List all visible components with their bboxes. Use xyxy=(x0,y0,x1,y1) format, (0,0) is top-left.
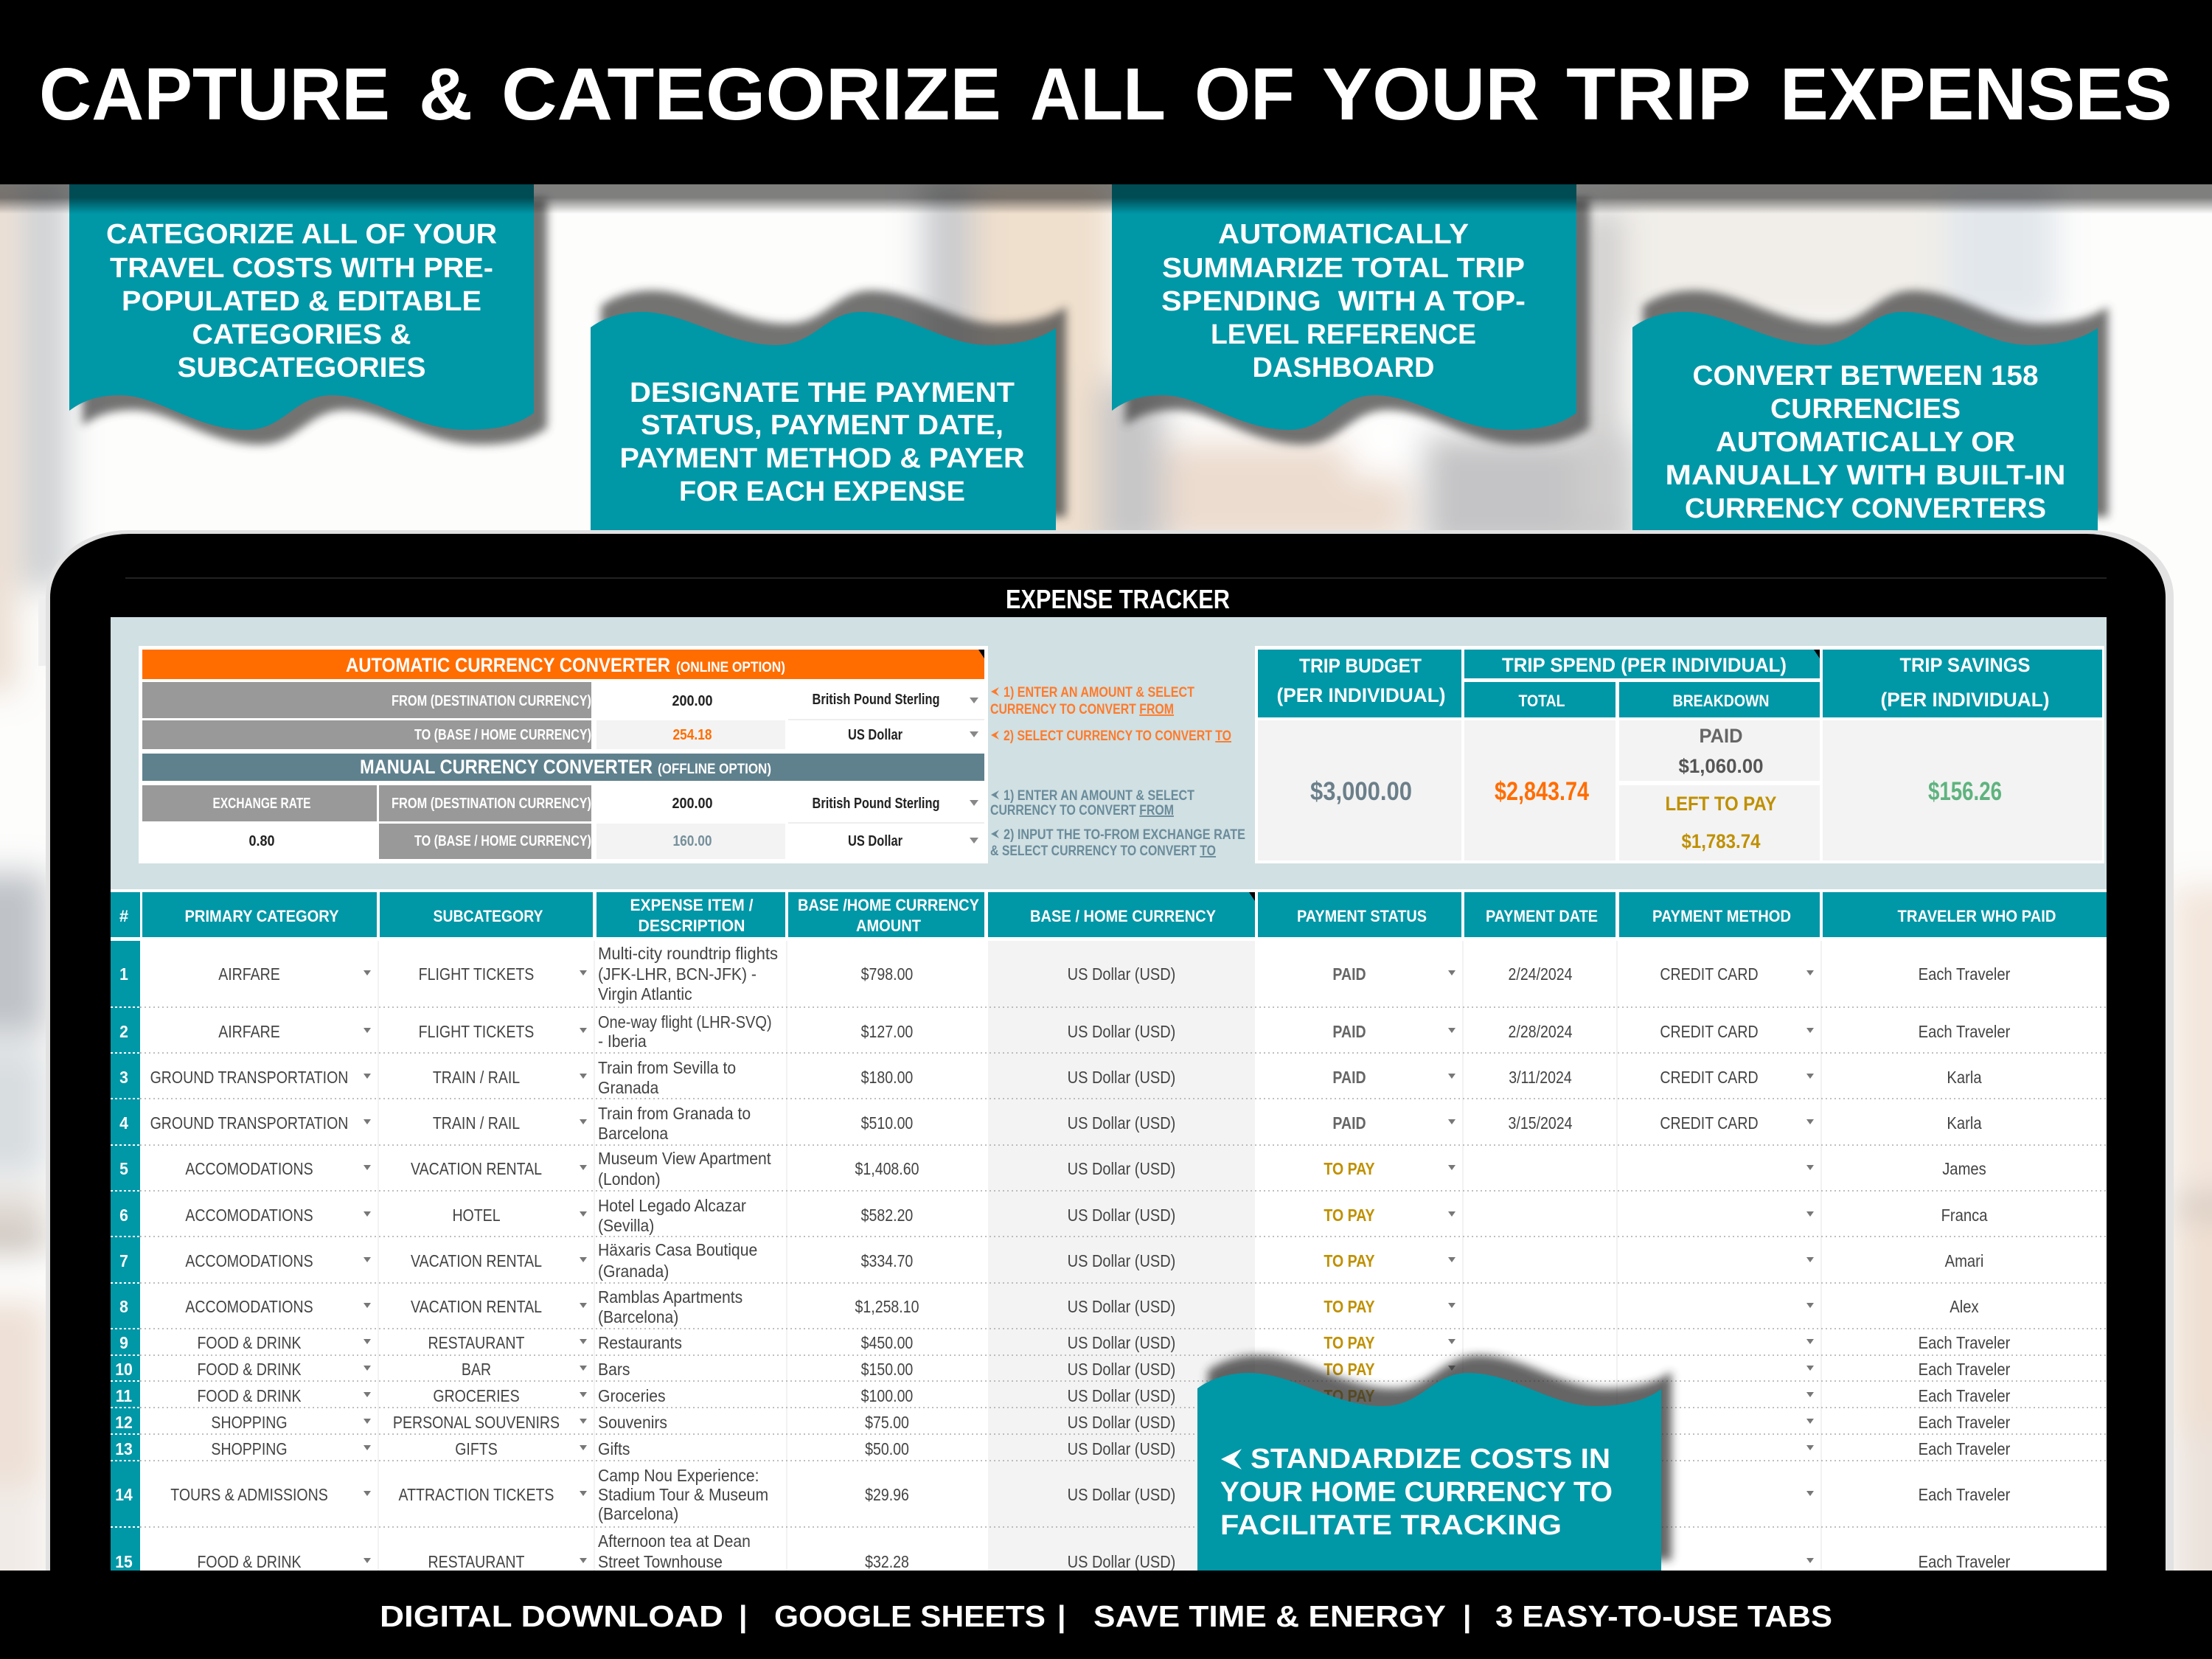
table header row: TRAVELER WHO PAID xyxy=(1898,907,2056,925)
callout: categorize costs: CATEGORIZE ALL OF YOUR xyxy=(106,219,497,250)
row 15: US Dollar (USD) xyxy=(1068,1552,1175,1571)
row 2: 2 xyxy=(119,1022,128,1041)
row 6: Hotel Legado Alcazar xyxy=(598,1196,746,1215)
panel: trip summary dashboard: TRIP BUDGET xyxy=(1299,655,1422,677)
row 4 xyxy=(119,1104,1983,1143)
table header row: SUBCATEGORY xyxy=(434,907,543,925)
row 3: Train from Sevilla to xyxy=(598,1058,736,1077)
row 11: Groceries xyxy=(598,1386,666,1405)
dropdown arrows xyxy=(364,970,1814,1563)
panel: converter instructions: 2) SELECT CURRENCY TO CONVERT TO xyxy=(1004,728,1231,744)
panel: currency converter: British Pound Sterling xyxy=(813,692,939,708)
row 10: BAR xyxy=(462,1360,491,1379)
row 1: Virgin Atlantic xyxy=(598,984,692,1004)
row 5: US Dollar (USD) xyxy=(1068,1159,1175,1178)
row 10: Each Traveler xyxy=(1919,1360,2010,1379)
callout: summarize spending: LEVEL REFERENCE xyxy=(1211,319,1476,350)
panel: trip summary dashboard: LEFT TO PAY xyxy=(1665,793,1777,815)
row 15: $32.28 xyxy=(865,1553,909,1571)
panel: trip summary dashboard: $156.26 xyxy=(1928,777,2002,806)
callout: convert currencies: CURRENCY CONVERTERS xyxy=(1685,493,2046,524)
row 13: GIFTS xyxy=(455,1440,498,1458)
table header row: # xyxy=(119,907,128,925)
row 4: TRAIN / RAIL xyxy=(433,1114,520,1133)
row 4: 3/15/2024 xyxy=(1509,1114,1573,1133)
row 11: Each Traveler xyxy=(1919,1386,2010,1405)
footer bar: | xyxy=(1057,1599,1065,1633)
panel: currency converter: TO (BASE / HOME CURRENCY) xyxy=(414,833,591,849)
panel: converter instructions: 2) INPUT THE TO-FROM EXCHANGE RATE xyxy=(1004,827,1245,843)
row 9: Restaurants xyxy=(598,1333,682,1352)
panel: expense table xyxy=(111,889,2107,1571)
row 15: Street Townhouse xyxy=(598,1552,723,1571)
callout: categorize costs: SUBCATEGORIES xyxy=(177,352,426,383)
row 14 xyxy=(115,1466,2010,1523)
row 3: Granada xyxy=(598,1078,659,1097)
panel: trip summary dashboard: $2,843.74 xyxy=(1495,777,1589,806)
row 1: CREDIT CARD xyxy=(1660,965,1759,984)
row 6: TO PAY xyxy=(1324,1206,1375,1225)
row 11: FOOD & DRINK xyxy=(197,1387,302,1405)
title banner: & xyxy=(419,53,473,136)
callout: summarize spending: SPENDING WITH A TOP- xyxy=(1161,286,1526,317)
row 14: 14 xyxy=(115,1485,133,1504)
row 13: Each Traveler xyxy=(1919,1439,2010,1458)
row 14: Camp Nou Experience: xyxy=(598,1466,759,1485)
row 9: FOOD & DRINK xyxy=(197,1334,302,1352)
row 7: Häxaris Casa Boutique xyxy=(598,1240,757,1259)
title banner xyxy=(0,0,2212,184)
row 9: RESTAURANT xyxy=(428,1334,524,1352)
row 1: 2/24/2024 xyxy=(1509,965,1573,984)
panel: trip summary dashboard: $3,000.00 xyxy=(1310,777,1412,806)
row 7: (Granada) xyxy=(598,1262,669,1281)
row 3: 3 xyxy=(119,1068,128,1087)
title banner: CAPTURE xyxy=(39,53,390,136)
row 6: ACCOMODATIONS xyxy=(185,1206,313,1225)
row 8: ACCOMODATIONS xyxy=(185,1298,313,1316)
row 8: Alex xyxy=(1950,1297,1979,1316)
row 11: GROCERIES xyxy=(433,1387,520,1405)
row 4: 4 xyxy=(119,1113,129,1133)
footer bar: SAVE TIME & ENERGY xyxy=(1093,1599,1446,1633)
panel: currency converter: 160.00 xyxy=(672,833,712,849)
row 15: Each Traveler xyxy=(1919,1552,2010,1571)
row 12: $75.00 xyxy=(865,1413,909,1432)
footer bar xyxy=(0,1571,2212,1659)
row 4: Barcelona xyxy=(598,1124,669,1143)
row 6: $582.20 xyxy=(861,1206,913,1225)
row 1: 1 xyxy=(119,964,128,984)
row 3: PAID xyxy=(1332,1068,1366,1087)
row 9: 9 xyxy=(119,1333,128,1352)
row 2: $127.00 xyxy=(861,1023,913,1041)
panel: currency converter: EXCHANGE RATE xyxy=(212,796,311,812)
row 8: (Barcelona) xyxy=(598,1307,678,1326)
row 14: US Dollar (USD) xyxy=(1068,1485,1175,1504)
row 14: TOURS & ADMISSIONS xyxy=(170,1486,328,1504)
row 8: TO PAY xyxy=(1324,1298,1375,1316)
callout: convert currencies: MANUALLY WITH BUILT-IN xyxy=(1665,460,2066,491)
callout: standardize costs xyxy=(1197,1355,1672,1578)
panel: converter instructions: CURRENCY TO CONVERT FROM xyxy=(990,803,1174,818)
row 3 xyxy=(119,1058,1983,1097)
row 3: 3/11/2024 xyxy=(1509,1068,1572,1087)
row 13: 13 xyxy=(115,1439,133,1458)
row 9: US Dollar (USD) xyxy=(1068,1333,1175,1352)
row 5: ACCOMODATIONS xyxy=(185,1160,313,1178)
row 13: Gifts xyxy=(598,1439,630,1458)
row 2: CREDIT CARD xyxy=(1660,1023,1759,1041)
footer bar: | xyxy=(739,1599,747,1633)
callout: summarize spending xyxy=(1112,184,1590,445)
panel: converter instructions xyxy=(990,685,1245,859)
row 12: SHOPPING xyxy=(211,1413,288,1432)
callout: payment status: DESIGNATE THE PAYMENT xyxy=(630,378,1015,408)
row 2: - Iberia xyxy=(598,1032,647,1051)
panel: currency converter: US Dollar xyxy=(848,833,902,849)
footer bar: | xyxy=(1463,1599,1471,1633)
table header row: PAYMENT STATUS xyxy=(1297,907,1427,925)
row 7: VACATION RENTAL xyxy=(411,1252,542,1270)
row 11: TO PAY xyxy=(1324,1387,1375,1405)
panel: converter instructions: 1) ENTER AN AMOUNT & SELECT xyxy=(1004,685,1194,700)
panel: currency converter: 200.00 xyxy=(672,693,712,709)
row 10 xyxy=(115,1360,2010,1379)
row 11: 11 xyxy=(116,1386,132,1405)
row 5: James xyxy=(1942,1159,1986,1178)
header shadow xyxy=(0,184,2212,214)
title banner: TRIP xyxy=(1566,53,1751,136)
spreadsheet screen xyxy=(111,584,2107,1571)
row 2: PAID xyxy=(1332,1023,1366,1041)
panel: currency converter: 0.80 xyxy=(249,833,274,849)
panel: currency converter: 254.18 xyxy=(672,727,712,743)
panel: trip summary dashboard: TRIP SAVINGS xyxy=(1899,654,2031,676)
panel: currency converter: FROM (DESTINATION CURRENCY) xyxy=(392,796,591,812)
callout: payment status: PAYMENT METHOD & PAYER xyxy=(619,443,1025,474)
row 4: GROUND TRANSPORTATION xyxy=(150,1114,348,1133)
row 15 xyxy=(115,1531,2010,1571)
row 5: (London) xyxy=(598,1169,661,1189)
table header row: PRIMARY CATEGORY xyxy=(184,907,339,925)
row 6: (Sevilla) xyxy=(598,1216,654,1235)
row 14: ATTRACTION TICKETS xyxy=(399,1486,554,1504)
row 3: GROUND TRANSPORTATION xyxy=(150,1068,348,1087)
panel: trip summary dashboard: PAID xyxy=(1699,725,1743,747)
row 13 xyxy=(115,1439,2010,1458)
row 11: US Dollar (USD) xyxy=(1068,1386,1175,1405)
row 8 xyxy=(119,1287,1979,1326)
row 1: FLIGHT TICKETS xyxy=(419,965,534,984)
row 3: $180.00 xyxy=(861,1068,913,1087)
row 2: 2/28/2024 xyxy=(1509,1023,1573,1041)
callout: categorize costs xyxy=(69,184,547,445)
row 6: 6 xyxy=(119,1206,128,1225)
row 15: Afternoon tea at Dean xyxy=(598,1531,751,1551)
footer bar: DIGITAL DOWNLOAD xyxy=(380,1599,723,1633)
table header row: DESCRIPTION xyxy=(639,917,745,935)
row 15: FOOD & DRINK xyxy=(197,1553,302,1571)
row 5 xyxy=(119,1149,1986,1189)
callout: standardize costs: YOUR HOME CURRENCY TO xyxy=(1220,1477,1613,1508)
row 5: $1,408.60 xyxy=(855,1160,919,1178)
row 15: 15 xyxy=(115,1552,133,1571)
row 8: $1,258.10 xyxy=(855,1298,919,1316)
row 4: US Dollar (USD) xyxy=(1068,1113,1175,1133)
row 12: Souvenirs xyxy=(598,1413,667,1432)
row 1: (JFK-LHR, BCN-JFK) - xyxy=(598,964,757,984)
row 14: Each Traveler xyxy=(1919,1485,2010,1504)
panel: trip summary dashboard: BREAKDOWN xyxy=(1672,692,1770,710)
panel: currency converter: MANUAL CURRENCY CONVERTER xyxy=(360,756,653,778)
table header row: BASE /HOME CURRENCY xyxy=(798,896,979,914)
row 5: TO PAY xyxy=(1324,1160,1375,1178)
row 2: Each Traveler xyxy=(1919,1022,2010,1041)
callout: convert currencies: CONVERT BETWEEN 158 xyxy=(1693,361,2038,392)
table header row: BASE / HOME CURRENCY xyxy=(1030,907,1216,925)
callout: convert currencies xyxy=(1632,291,2108,538)
row 6: US Dollar (USD) xyxy=(1068,1206,1175,1225)
callout: standardize costs: FACILITATE TRACKING xyxy=(1220,1510,1562,1541)
panel: currency converter: AUTOMATIC CURRENCY CONVERTER xyxy=(346,654,670,676)
title banner: CATEGORIZE xyxy=(501,53,1001,136)
row 15: RESTAURANT xyxy=(428,1553,524,1571)
row 3: Karla xyxy=(1947,1068,1983,1087)
row 8: 8 xyxy=(119,1297,128,1316)
row 2 xyxy=(119,1012,2010,1051)
panel: currency converter xyxy=(139,646,988,863)
footer bar: GOOGLE SHEETS xyxy=(774,1599,1046,1633)
title banner: OF xyxy=(1194,53,1295,136)
row 14: $29.96 xyxy=(865,1486,909,1504)
panel: currency converter: (OFFLINE OPTION) xyxy=(658,762,771,777)
row 2: AIRFARE xyxy=(218,1023,280,1041)
row 13: SHOPPING xyxy=(211,1440,288,1458)
callout: convert currencies: CURRENCIES xyxy=(1770,394,1961,425)
table header row: AMOUNT xyxy=(856,917,922,935)
row 12: US Dollar (USD) xyxy=(1068,1413,1175,1432)
panel: converter instructions: 1) ENTER AN AMOUNT & SELECT xyxy=(1004,788,1194,804)
row 13: US Dollar (USD) xyxy=(1068,1439,1175,1458)
row 11: $100.00 xyxy=(861,1387,913,1405)
row 10: TO PAY xyxy=(1324,1360,1375,1379)
row 5: Museum View Apartment xyxy=(598,1149,771,1168)
row 1: $798.00 xyxy=(861,965,913,984)
panel: currency converter: US Dollar xyxy=(848,727,902,743)
table header row: PAYMENT METHOD xyxy=(1652,907,1791,925)
row 4: PAID xyxy=(1332,1114,1366,1133)
row 5: VACATION RENTAL xyxy=(411,1160,542,1178)
callout: summarize spending: SUMMARIZE TOTAL TRIP xyxy=(1162,253,1525,284)
row 7: ACCOMODATIONS xyxy=(185,1252,313,1270)
panel: trip summary dashboard: (PER INDIVIDUAL) xyxy=(1880,689,2050,711)
callout: standardize costs: STANDARDIZE COSTS IN xyxy=(1251,1444,1610,1475)
row 9 xyxy=(119,1333,2010,1352)
row 2: FLIGHT TICKETS xyxy=(419,1023,534,1041)
laptop frame xyxy=(38,530,2174,1640)
row 1: US Dollar (USD) xyxy=(1068,964,1175,984)
row 7 xyxy=(119,1240,1983,1281)
row 10: Bars xyxy=(598,1360,630,1379)
row 7: TO PAY xyxy=(1324,1252,1375,1270)
row 13: $50.00 xyxy=(865,1440,909,1458)
row 12: Each Traveler xyxy=(1919,1413,2010,1432)
row 12 xyxy=(115,1413,2010,1432)
callout: categorize costs: CATEGORIES & xyxy=(192,319,411,350)
row 1: Multi-city roundtrip flights xyxy=(598,945,778,963)
row 10: $150.00 xyxy=(861,1360,913,1379)
callout: convert currencies: AUTOMATICALLY OR xyxy=(1716,427,2015,458)
row 1: AIRFARE xyxy=(218,965,280,984)
row 6: HOTEL xyxy=(452,1206,501,1225)
row 4: Train from Granada to xyxy=(598,1104,751,1123)
row 7: US Dollar (USD) xyxy=(1068,1251,1175,1270)
row 14: Stadium Tour & Museum xyxy=(598,1485,768,1504)
callout: categorize costs: TRAVEL COSTS WITH PRE- xyxy=(110,253,493,284)
panel: currency converter: British Pound Sterling xyxy=(813,796,939,812)
row 14: (Barcelona) xyxy=(598,1504,678,1523)
row 10: FOOD & DRINK xyxy=(197,1360,302,1379)
row 12: 12 xyxy=(115,1413,133,1432)
callout: payment status: FOR EACH EXPENSE xyxy=(679,476,965,507)
table header row: PAYMENT DATE xyxy=(1486,907,1598,925)
callout: summarize spending: DASHBOARD xyxy=(1252,352,1435,383)
row 8: VACATION RENTAL xyxy=(411,1298,542,1316)
callout: payment status xyxy=(591,291,1066,538)
row 9: $450.00 xyxy=(861,1334,913,1352)
row 8: Ramblas Apartments xyxy=(598,1287,742,1307)
row 3: TRAIN / RAIL xyxy=(433,1068,520,1087)
row 3: CREDIT CARD xyxy=(1660,1068,1759,1087)
panel: trip summary dashboard: TOTAL xyxy=(1519,692,1565,710)
row 12: PERSONAL SOUVENIRS xyxy=(393,1413,560,1432)
row 9: Each Traveler xyxy=(1919,1333,2010,1352)
callout: payment status: STATUS, PAYMENT DATE, xyxy=(641,410,1004,441)
panel: converter instructions: & SELECT CURRENCY TO CONVERT TO xyxy=(990,844,1216,859)
row 2: US Dollar (USD) xyxy=(1068,1022,1175,1041)
row 11 xyxy=(116,1386,2010,1405)
panel: trip summary dashboard: $1,783.74 xyxy=(1681,830,1761,852)
panel: converter instructions: CURRENCY TO CONVERT FROM xyxy=(990,702,1174,717)
footer bar: 3 EASY-TO-USE TABS xyxy=(1495,1599,1832,1633)
row 10: US Dollar (USD) xyxy=(1068,1360,1175,1379)
title banner: ALL xyxy=(1030,53,1166,136)
row 1 xyxy=(119,945,2010,1004)
panel: trip summary dashboard: (PER INDIVIDUAL) xyxy=(1277,684,1445,706)
row 1: Each Traveler xyxy=(1919,964,2010,984)
row 6 xyxy=(119,1196,1988,1235)
row 9: TO PAY xyxy=(1324,1334,1375,1352)
row 1: PAID xyxy=(1332,965,1366,984)
row 4: CREDIT CARD xyxy=(1660,1114,1759,1133)
row 7: 7 xyxy=(119,1251,128,1270)
table header row xyxy=(111,892,2107,937)
panel: trip summary dashboard: TRIP SPEND (PER INDIVIDUAL) xyxy=(1502,654,1787,676)
row 3: US Dollar (USD) xyxy=(1068,1068,1175,1087)
sheet title: EXPENSE TRACKER xyxy=(1006,584,1230,614)
panel: currency converter: FROM (DESTINATION CURRENCY) xyxy=(392,693,591,709)
row 4: Karla xyxy=(1947,1113,1983,1133)
panel: currency converter: 200.00 xyxy=(672,796,712,812)
callout: summarize spending: AUTOMATICALLY xyxy=(1218,219,1469,250)
row 7: $334.70 xyxy=(861,1252,913,1270)
row 6: Franca xyxy=(1941,1206,1988,1225)
title banner: YOUR xyxy=(1322,53,1540,136)
row 5: 5 xyxy=(119,1159,128,1178)
row 10: 10 xyxy=(115,1360,133,1379)
panel: currency converter: (ONLINE OPTION) xyxy=(676,660,785,675)
callout: categorize costs: POPULATED & EDITABLE xyxy=(122,286,481,317)
row 7: Amari xyxy=(1945,1251,1983,1270)
table header row: EXPENSE ITEM / xyxy=(630,896,754,914)
row 4: $510.00 xyxy=(861,1114,913,1133)
panel: trip summary dashboard: $1,060.00 xyxy=(1678,755,1764,777)
row 8: US Dollar (USD) xyxy=(1068,1297,1175,1316)
panel: currency converter: TO (BASE / HOME CURRENCY) xyxy=(414,727,591,743)
panel: trip summary dashboard xyxy=(1255,646,2104,863)
title banner: EXPENSES xyxy=(1780,53,2172,136)
row 2: One-way flight (LHR-SVQ) xyxy=(598,1012,772,1032)
